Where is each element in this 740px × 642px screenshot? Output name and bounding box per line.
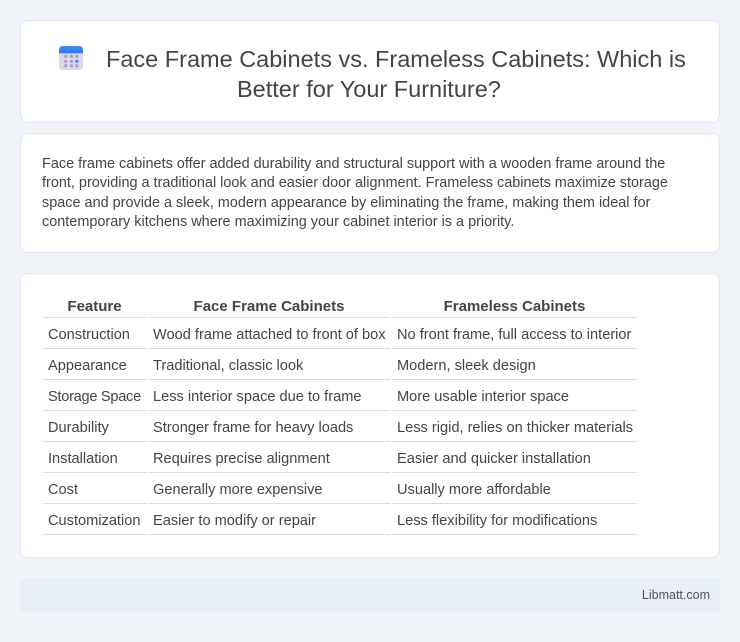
panel: summary text <box>20 133 720 253</box>
text block: summary: Face frame cabinets offer added durability and structural support with a wooden frame around the <box>42 156 665 172</box>
comparison table: Durability <box>48 420 109 436</box>
comparison table: Appearance <box>48 358 127 374</box>
title: Better for Your Furniture? <box>237 76 501 102</box>
comparison table: Cost <box>48 482 78 498</box>
comparison table: Traditional, classic look <box>153 358 303 374</box>
comparison table: Installation <box>48 450 118 466</box>
comparison table: Modern, sleek design <box>397 358 536 374</box>
text block: summary: space and provide a sleek, modern appearance by eliminating the frame, making them ideal for <box>42 194 650 210</box>
comparison table: Generally more expensive <box>153 482 323 498</box>
comparison table: No front frame, full access to interior <box>397 326 631 342</box>
footer <box>20 578 720 612</box>
comparison table: Stronger frame for heavy loads <box>153 420 353 436</box>
comparison table: Easier to modify or repair <box>153 512 316 528</box>
comparison table: Less flexibility for modifications <box>397 512 597 528</box>
panel: title card <box>20 20 720 123</box>
title: Face Frame Cabinets vs. Frameless Cabinets: Which is <box>106 46 686 72</box>
comparison table: Face Frame Cabinets <box>194 298 344 314</box>
comparison table: Customization <box>48 512 140 528</box>
comparison table: Feature <box>67 298 122 314</box>
comparison table: Requires precise alignment <box>153 450 330 466</box>
comparison table: Frameless Cabinets <box>444 298 585 314</box>
comparison table: Easier and quicker installation <box>397 450 591 466</box>
icon: calendar <box>59 46 83 70</box>
comparison table: Less interior space due to frame <box>153 388 361 404</box>
text block: summary: contemporary kitchens where maximizing your cabinet interior is a priority. <box>42 214 514 230</box>
text block: summary <box>42 156 668 230</box>
comparison table: Wood frame attached to front of box <box>153 326 386 342</box>
comparison table <box>43 298 637 535</box>
comparison table: More usable interior space <box>397 388 569 404</box>
comparison table: Usually more affordable <box>397 482 551 498</box>
panel: comparison table <box>20 273 720 558</box>
comparison table: Storage Space <box>48 388 141 404</box>
title <box>106 46 686 102</box>
text block: summary: front, providing a traditional look and easier door alignment. Frameless cabinets maximize storage <box>42 174 668 190</box>
comparison table: Less rigid, relies on thicker materials <box>397 420 633 436</box>
comparison table: Construction <box>48 326 130 342</box>
footer credit: Libmatt.com <box>642 588 710 602</box>
